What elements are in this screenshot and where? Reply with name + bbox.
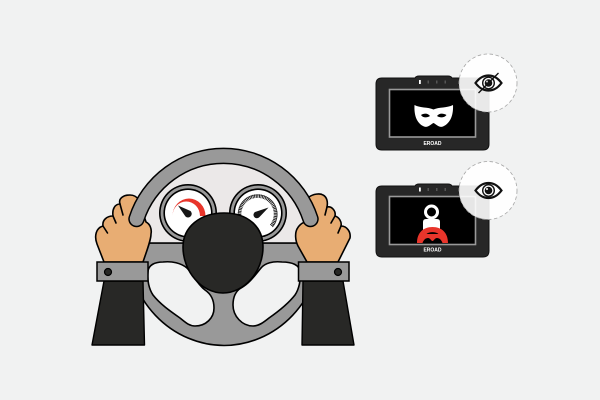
top device: masked screen: [376, 76, 489, 150]
steering wheel lower body and spokes: [127, 243, 321, 346]
callout: open eye: [459, 162, 517, 220]
status lights: [419, 80, 446, 84]
brand label: EROAD: [423, 141, 442, 147]
callout: eye crossed out: [459, 54, 517, 112]
right sleeve: [302, 281, 354, 345]
speedometer needle: [178, 206, 192, 217]
icon: red steering wheel: [417, 227, 448, 243]
status lights: [419, 188, 446, 192]
left sleeve: [92, 281, 144, 345]
right cuff with button: [298, 262, 349, 281]
icon: mask: [414, 105, 453, 127]
dashboard panel: [141, 160, 307, 243]
right hand: [296, 194, 350, 262]
icon: driver head and shoulders: [423, 206, 440, 232]
right gauge: tachometer: [229, 184, 287, 242]
steering wheel upper rim: [136, 156, 310, 219]
tick marks: [240, 196, 276, 226]
dashboard lower edge: [141, 242, 307, 244]
left gauge: speedometer: [159, 184, 217, 242]
steering wheel hub: [183, 213, 263, 293]
brand label: EROAD: [423, 247, 442, 253]
left cuff with button: [97, 262, 148, 281]
bottom device: driver on screen: [376, 184, 489, 257]
red speed arc: [172, 198, 206, 216]
tachometer needle: [253, 208, 268, 218]
left hand: [96, 195, 151, 262]
